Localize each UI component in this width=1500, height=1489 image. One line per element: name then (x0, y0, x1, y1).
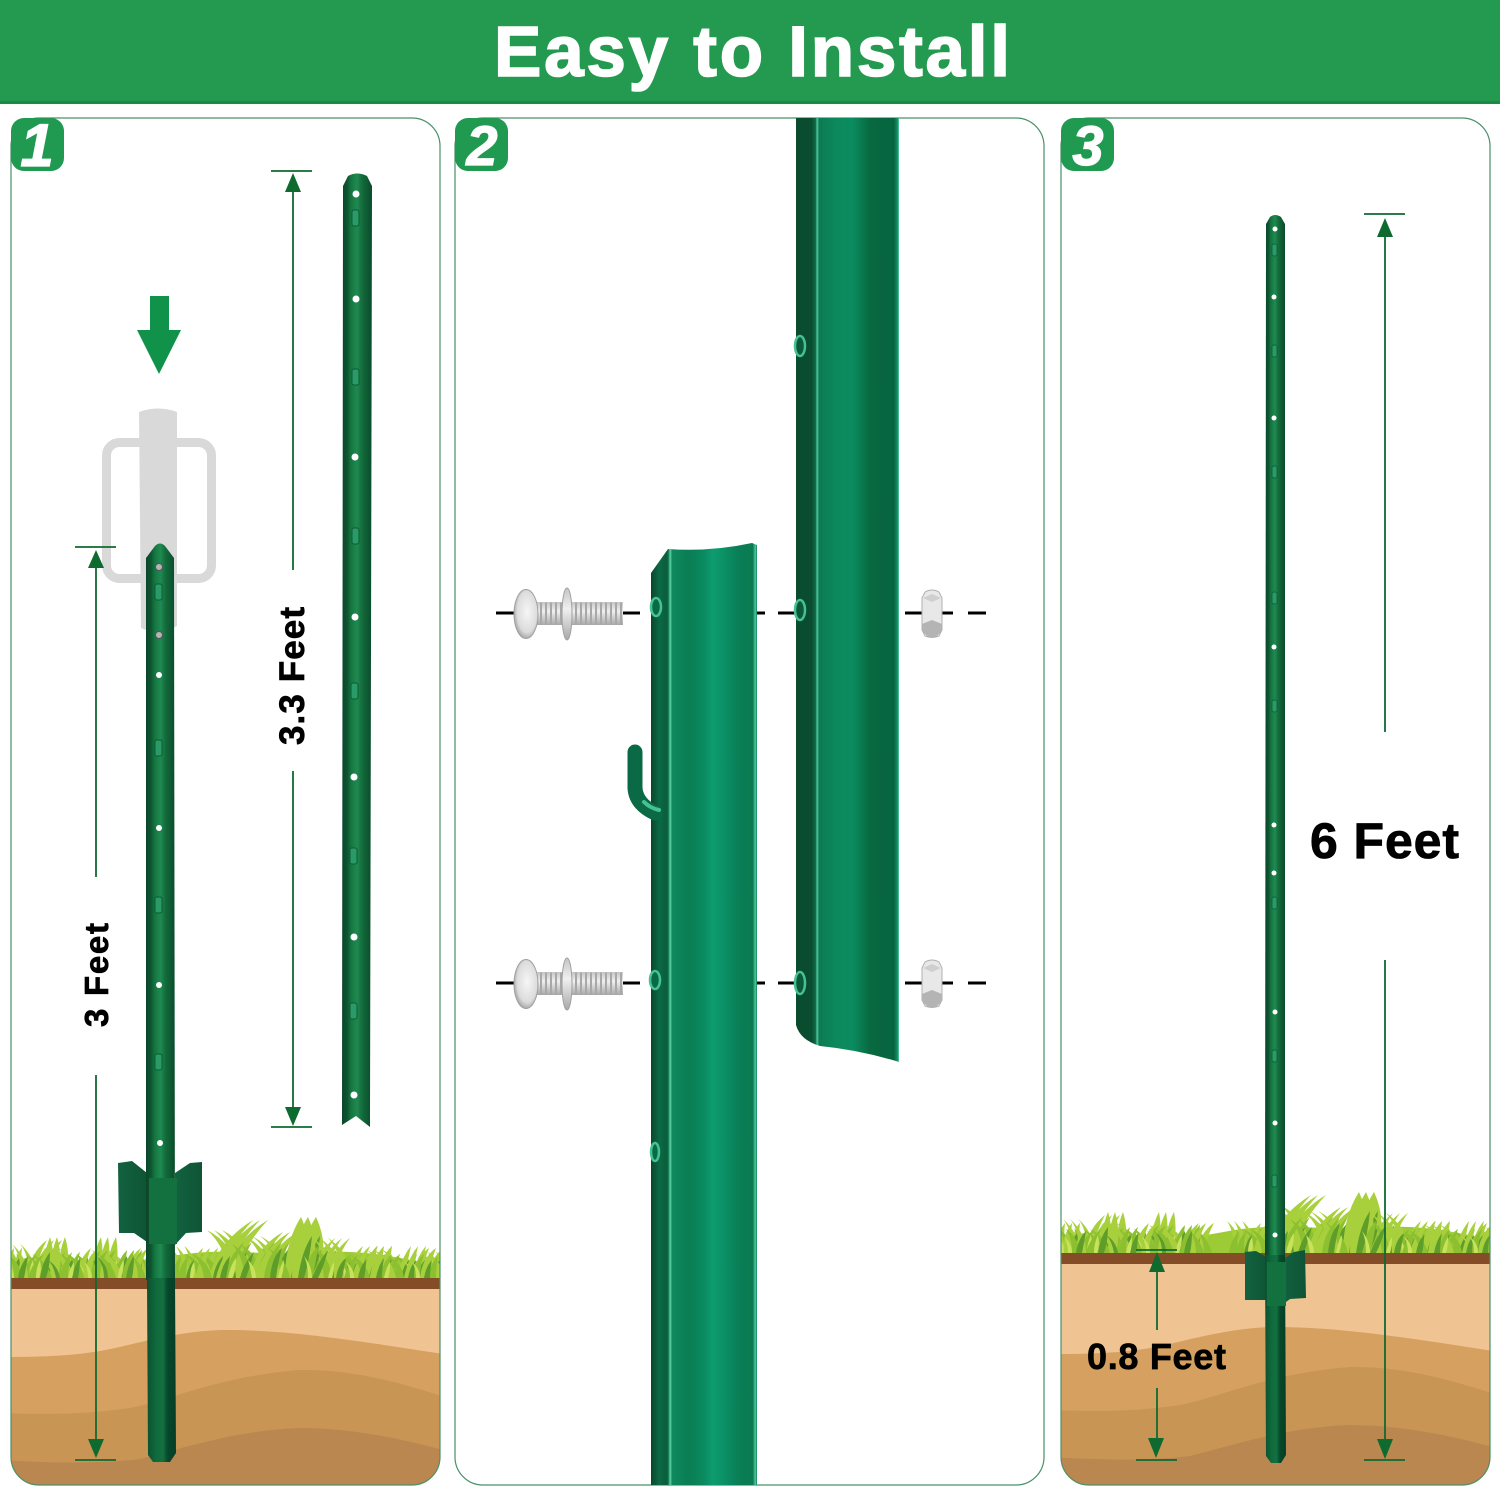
icon: upper bolt (514, 588, 623, 640)
dimension: 3.3 feet (271, 171, 312, 1127)
assembled fence post with anchor plate (1245, 215, 1306, 1463)
label: 3.3 feet: 3.3 Feet (273, 607, 312, 745)
banner: title bar (0, 0, 1500, 104)
dimension: 0.8 feet (1087, 1250, 1226, 1460)
icon: lower bolt (514, 958, 623, 1010)
icon: grey post driver tool (106, 408, 212, 632)
label: 3 feet: 3 Feet (78, 923, 115, 1027)
panel: step 2 bolt posts together (455, 114, 1044, 1485)
icon: step badge 1 (11, 112, 64, 179)
dimension: 3 feet (75, 547, 116, 1460)
icon: step badge 1: 1 (20, 112, 54, 179)
ground: grass and soil layers (0, 1217, 452, 1489)
upper fence post close-up (795, 118, 899, 1062)
icon: step badge 3: 3 (1072, 114, 1104, 177)
icon: step badge 2: 2 (465, 114, 498, 177)
icon: step badge 2 (455, 114, 508, 177)
fence post: driven into ground with anchor plate (118, 544, 202, 1462)
icon: upper nut (922, 590, 942, 638)
panel: step 3 finished post (1050, 114, 1500, 1489)
icon: lower nut (922, 960, 942, 1008)
label: 6 feet: 6 Feet (1310, 813, 1459, 869)
label: 0.8 feet: 0.8 Feet (1087, 1336, 1226, 1377)
panel: step 1 drive post (0, 112, 452, 1489)
dimension: 6 feet (1310, 214, 1459, 1460)
title: Easy to Install (494, 13, 1010, 92)
lower fence post close-up with hook (635, 543, 757, 1485)
fence post: upper section (342, 174, 372, 1127)
ground: grass and soil layers (1050, 1192, 1500, 1489)
icon: step badge 3 (1061, 114, 1114, 177)
dashed alignment lines (496, 613, 986, 983)
icon: downward arrow (137, 296, 181, 374)
